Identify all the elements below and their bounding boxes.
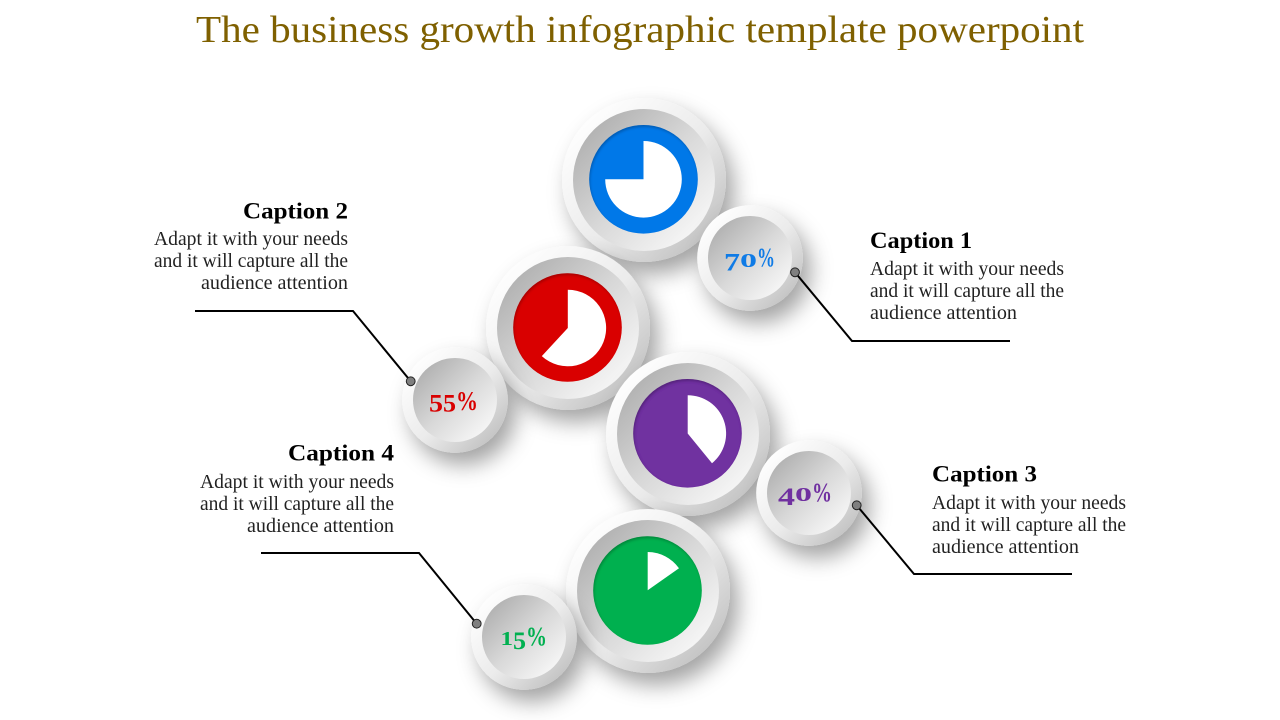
panel: percent badge 70% — [697, 205, 803, 311]
title: The business growth infographic template powerpoint — [196, 9, 1084, 51]
text block: caption 3: Caption 3 — [932, 462, 1037, 486]
leader line: caption 1 — [791, 268, 1010, 341]
text block: caption 1 — [870, 228, 1064, 324]
text block: caption 1: Adapt it with your needs — [870, 259, 1064, 280]
text block: caption 4: Caption 4 — [288, 440, 395, 466]
text block: caption 1: audience attention — [870, 303, 1017, 324]
panel: percent badge 70%: 0 — [740, 250, 757, 272]
panel: red pie disc 55% — [486, 246, 650, 410]
text block: caption 4: and it will capture all the — [200, 494, 394, 515]
panel: percent badge 55%: % — [456, 386, 478, 416]
text block: caption 2 — [154, 198, 348, 294]
text block: caption 2: and it will capture all the — [154, 251, 348, 272]
panel: percent badge 55%: 5 — [443, 391, 456, 418]
text block: caption 3: Adapt it with your needs — [932, 493, 1126, 514]
panel: percent badge 15% — [471, 584, 577, 690]
panel: percent badge 40%: 4 — [778, 484, 796, 511]
text block: caption 4: audience attention — [247, 516, 394, 537]
panel: green pie disc 15% — [566, 509, 730, 673]
panel: percent badge 15%: % — [526, 622, 547, 652]
panel: percent badge 55% — [402, 347, 508, 453]
text block: caption 3 — [932, 462, 1126, 558]
panel: percent badge 15%: 1 — [500, 628, 513, 650]
text block: caption 2: Adapt it with your needs — [154, 229, 348, 250]
text block: caption 1: and it will capture all the — [870, 281, 1064, 302]
text block: caption 2: Caption 2 — [243, 198, 348, 224]
leader line: caption 3 — [852, 501, 1072, 574]
panel: percent badge 15%: 5 — [513, 628, 526, 655]
panel: purple pie disc 40% — [606, 352, 770, 516]
panel: blue pie disc 70% — [562, 98, 726, 262]
panel: percent badge 40% — [756, 440, 862, 546]
text block: caption 3: and it will capture all the — [932, 515, 1126, 536]
text block: caption 1: Caption 1 — [870, 228, 972, 253]
text block: caption 4 — [200, 440, 395, 537]
panel: percent badge 40%: % — [812, 478, 832, 508]
leader line: caption 4 — [261, 553, 481, 628]
text block: caption 3: audience attention — [932, 537, 1079, 558]
panel: percent badge 70%: 7 — [724, 250, 740, 276]
text block: caption 4: Adapt it with your needs — [200, 472, 394, 493]
panel: percent badge 40%: 0 — [795, 484, 812, 506]
panel: percent badge 55%: 5 — [429, 391, 443, 418]
panel: percent badge 70%: % — [757, 242, 775, 272]
text block: caption 2: audience attention — [201, 273, 348, 294]
leader line: caption 2 — [195, 311, 415, 386]
